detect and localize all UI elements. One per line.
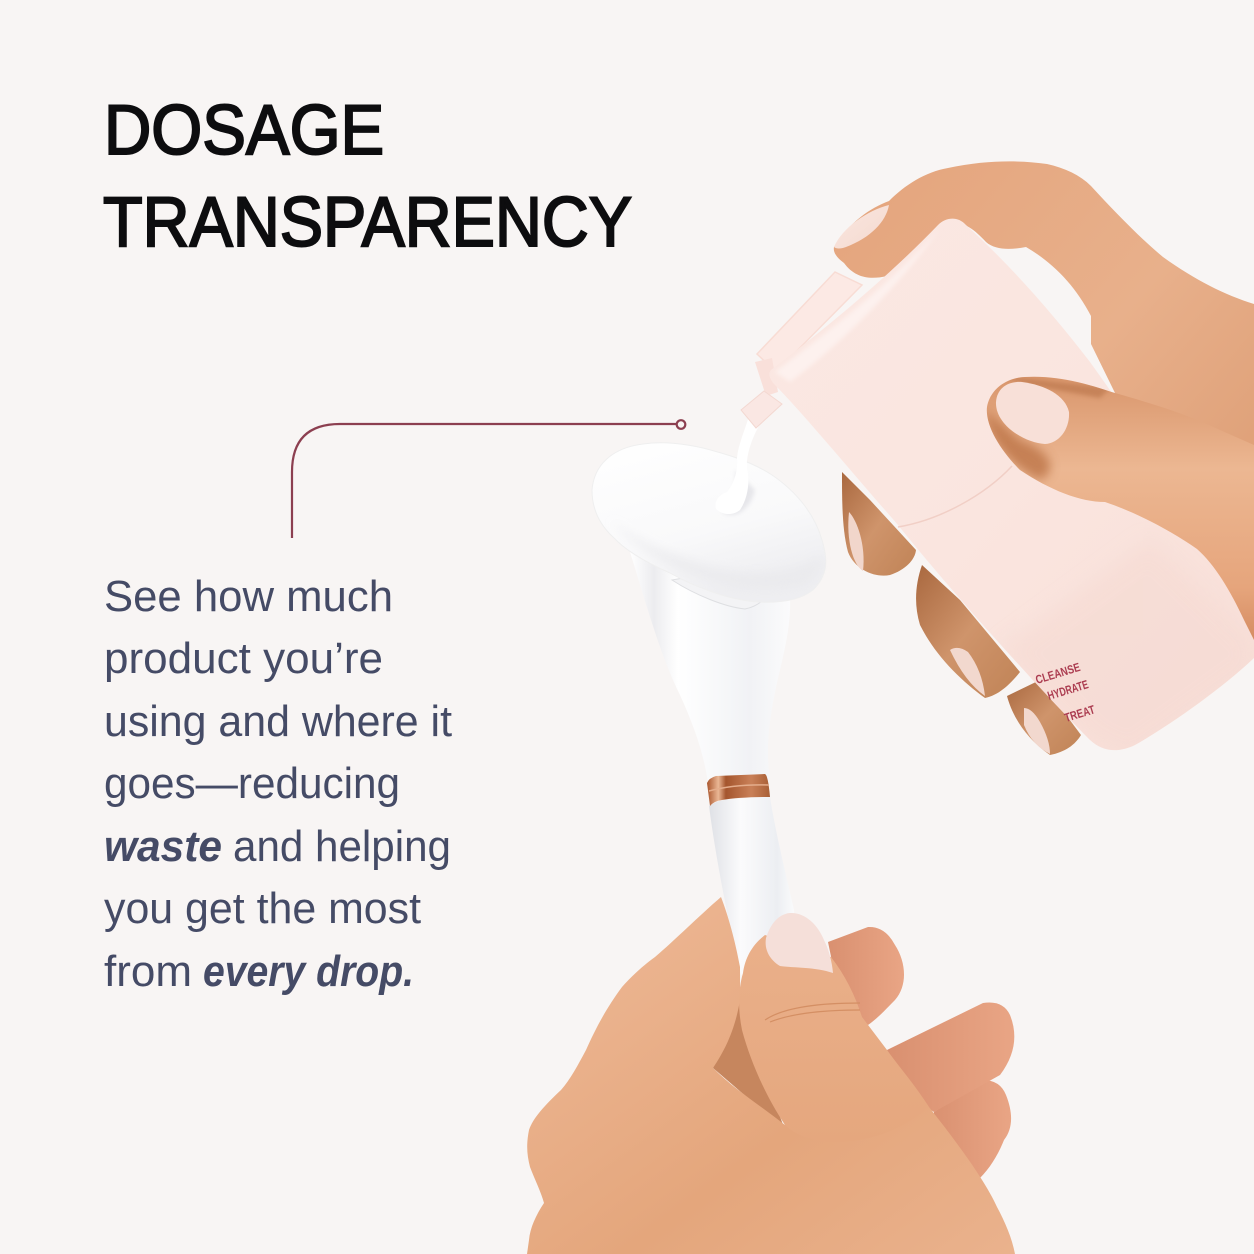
middle finger [887,1002,1014,1112]
body text: waste [104,822,222,871]
title: DOSAGE [104,91,384,170]
lower stick [709,797,800,1000]
callout leader line [292,420,685,538]
thumb nail [766,913,833,973]
body text: and helping [233,822,451,871]
bottle hand: palm and index finger [834,161,1254,650]
bottle seam [898,466,1012,527]
bottle labels: TREAT [1063,702,1097,725]
shadowed inner palm [713,990,785,1130]
title [103,91,632,262]
finger 2 [916,565,1020,698]
hand and index finger [527,897,1015,1254]
body text [104,572,452,996]
bottle labels: HYDRATE [1046,677,1090,703]
bottle labels [1034,660,1097,725]
bottle lower shading [1036,684,1038,685]
holding hand [527,897,1015,1254]
bottle [769,219,1254,760]
thumb tip shadow [985,376,1110,480]
body text: you get the most [104,884,421,933]
upper finger [828,927,904,1025]
lower finger [930,1080,1011,1178]
nozzle [741,391,782,428]
body text: See how much [104,572,393,621]
cream drip shadow [722,470,755,515]
cream under lip [672,575,762,609]
finger 3 [1007,680,1081,755]
cream on head [592,443,826,602]
finger 1 [842,472,916,576]
applicator spatula [592,416,826,1000]
bottle hand: back fingers [842,472,1081,755]
knuckle crease [765,1003,860,1022]
bottle pump [741,272,862,428]
nail 1 [848,512,864,571]
thumb over grip [739,935,929,1142]
bottle hand: thumb [985,376,1254,640]
nail 3 [1024,708,1050,754]
copper band [707,774,770,806]
index nail [834,205,889,248]
body text: product you’re [104,634,383,683]
body text: every drop. [203,947,414,996]
spatula handle [630,552,790,783]
body text: goes—reducing [104,759,400,808]
body text: from [104,947,192,996]
nail 2 [950,648,985,696]
cream drip [715,416,760,514]
thumb nail [996,382,1069,444]
bottle labels: CLEANSE [1034,660,1082,687]
bottle cap shoulder shading [775,228,1254,760]
body text: using and where it [104,697,452,746]
title: TRANSPARENCY [103,184,632,262]
